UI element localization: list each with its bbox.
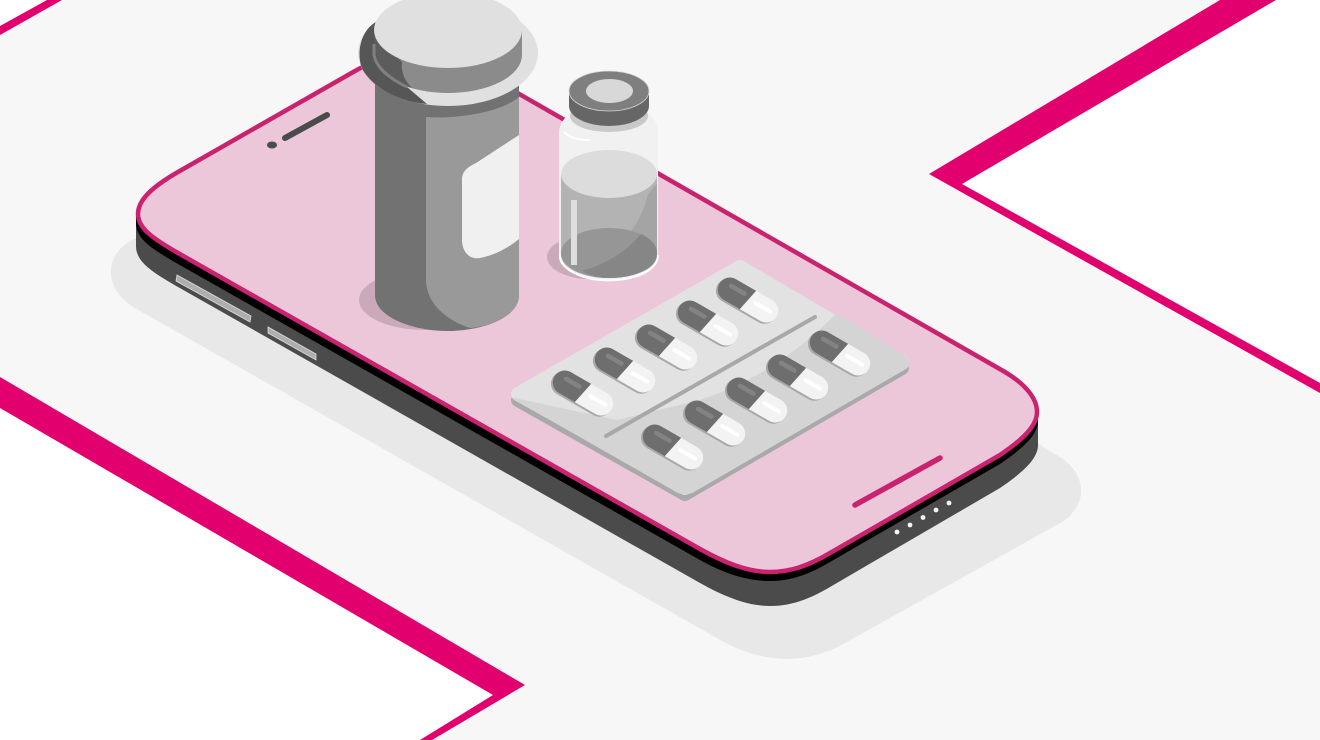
pills: lower row <box>637 326 875 476</box>
phone <box>136 53 1038 606</box>
cap side <box>374 30 522 93</box>
flange <box>358 0 538 106</box>
charging port dots <box>895 501 951 534</box>
vial cap side <box>569 91 649 126</box>
liquid floor <box>561 228 657 278</box>
pink zigzag line: top right <box>929 0 1320 393</box>
vial shadow <box>547 235 633 279</box>
bottle label <box>462 135 519 258</box>
vial cap centre <box>586 79 633 103</box>
phone shadow <box>111 238 1081 659</box>
bottle shadow <box>359 270 491 330</box>
blister thickness <box>518 272 902 494</box>
shoulder highlight <box>564 132 590 140</box>
bottle body <box>375 70 519 331</box>
earpiece speaker <box>285 115 327 138</box>
volume button one <box>176 275 251 322</box>
blister pack <box>510 267 910 494</box>
liquid <box>561 174 657 278</box>
blister face <box>518 267 902 488</box>
phone screen <box>138 53 1037 572</box>
liquid floor shaded <box>582 234 657 278</box>
phone edge <box>136 214 1038 581</box>
phone body <box>136 214 1038 606</box>
front camera <box>267 142 277 148</box>
pills: upper row <box>547 273 783 422</box>
cap top <box>374 0 522 68</box>
pink zigzag line: bottom left <box>0 377 525 740</box>
cap rim highlight <box>374 44 407 87</box>
flange shadow <box>360 22 427 104</box>
liquid shaded side <box>580 184 657 278</box>
vial cap top <box>569 71 649 111</box>
pill bottle <box>358 0 538 331</box>
glass bottom rim <box>560 255 658 280</box>
vial <box>547 71 658 280</box>
volume button two <box>268 327 316 360</box>
blister divider <box>606 317 815 436</box>
blister shaded area <box>510 313 910 494</box>
bottle lit side <box>426 97 519 328</box>
pink zigzag line: top left <box>0 0 62 35</box>
cap side shadow <box>374 30 412 88</box>
cap shadow on glass <box>570 100 648 132</box>
liquid surface <box>561 150 657 198</box>
home indicator <box>855 458 940 505</box>
glass reflection bar <box>571 200 577 265</box>
glass body <box>559 113 658 280</box>
